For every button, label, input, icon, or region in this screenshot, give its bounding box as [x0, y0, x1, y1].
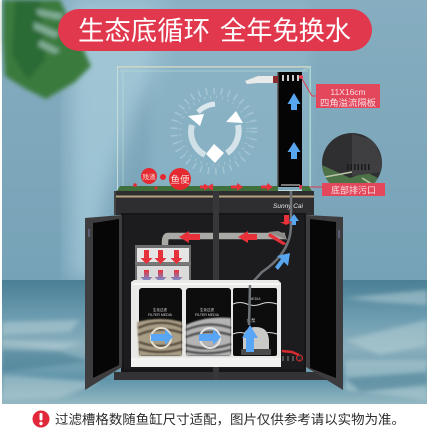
waste labels: 鱼便 — [170, 174, 190, 186]
overflow column — [277, 72, 302, 187]
callout: overflow plate: 四角溢流隔板 — [320, 97, 376, 108]
return hose — [248, 191, 299, 325]
waste labels — [133, 168, 191, 190]
inset: drain port detail — [322, 133, 382, 183]
icon: red down arrows — [140, 250, 182, 264]
glass aquarium — [118, 66, 310, 190]
title banner: 生态底循环 — [78, 16, 210, 46]
filter drip tray — [135, 245, 191, 283]
icon: stand blue arrow — [289, 214, 299, 225]
water swirl with circulation arrows — [174, 91, 254, 171]
sump chamber 2: media: FILTER MEDIA — [195, 313, 220, 317]
sump chamber 1: bio media — [137, 288, 182, 356]
icon: blue up arrow upper — [288, 93, 300, 110]
icon: red pipe arrow right — [238, 231, 257, 243]
substrate — [117, 186, 312, 191]
icon: blue up arrow lower — [288, 142, 300, 159]
icon: hose blue arrow — [275, 253, 290, 270]
footer notice: 过滤槽格数随鱼缸尺寸适配，图片仅供参考请以实物为准。 — [55, 412, 405, 427]
callout: bottom drain: 底部排污口 — [331, 184, 376, 196]
callout: overflow plate — [299, 75, 380, 108]
icon: gradient down arrows — [140, 270, 182, 283]
icon: warning — [32, 410, 50, 428]
right door — [306, 215, 343, 390]
icon: blue flow arrow — [151, 329, 173, 345]
sump chamber 3: pump: MEDIA — [249, 297, 261, 301]
sump chamber 3: pump: 水泵 — [246, 317, 256, 323]
return pipe — [165, 231, 287, 247]
icon: blue up arrow — [242, 325, 258, 352]
sump chamber 1: bio media: 生化过滤 — [153, 307, 167, 312]
icon: red valve arrow — [268, 233, 287, 245]
red flow arrows on substrate — [200, 183, 273, 191]
sump chamber 2: media — [186, 288, 231, 356]
waste labels: 残渣 — [142, 172, 156, 181]
decorative leaf — [3, 0, 91, 99]
icon: blue flow arrow — [199, 329, 221, 345]
title banner — [58, 9, 372, 51]
icon: red pipe arrow left — [179, 231, 200, 243]
cabinet interior — [114, 191, 330, 380]
return nozzle — [245, 76, 278, 84]
cabinet top with gold trim: Sunny Cai — [273, 203, 304, 210]
sump chamber 1: bio media: FILTER MEDIA — [148, 313, 173, 317]
callout: bottom drain — [299, 183, 385, 196]
title banner: 全年免换水 — [220, 16, 351, 46]
left door — [85, 215, 122, 390]
sump chamber 3: pump — [233, 285, 277, 356]
callout: overflow plate: 11X16cm — [330, 87, 366, 97]
sump chamber 2: media: 生化过滤 — [200, 307, 214, 312]
drain valve — [282, 351, 302, 361]
cabinet top with gold trim — [114, 191, 314, 215]
sump tank frame — [131, 280, 281, 367]
icon: stand red arrow — [280, 215, 292, 225]
